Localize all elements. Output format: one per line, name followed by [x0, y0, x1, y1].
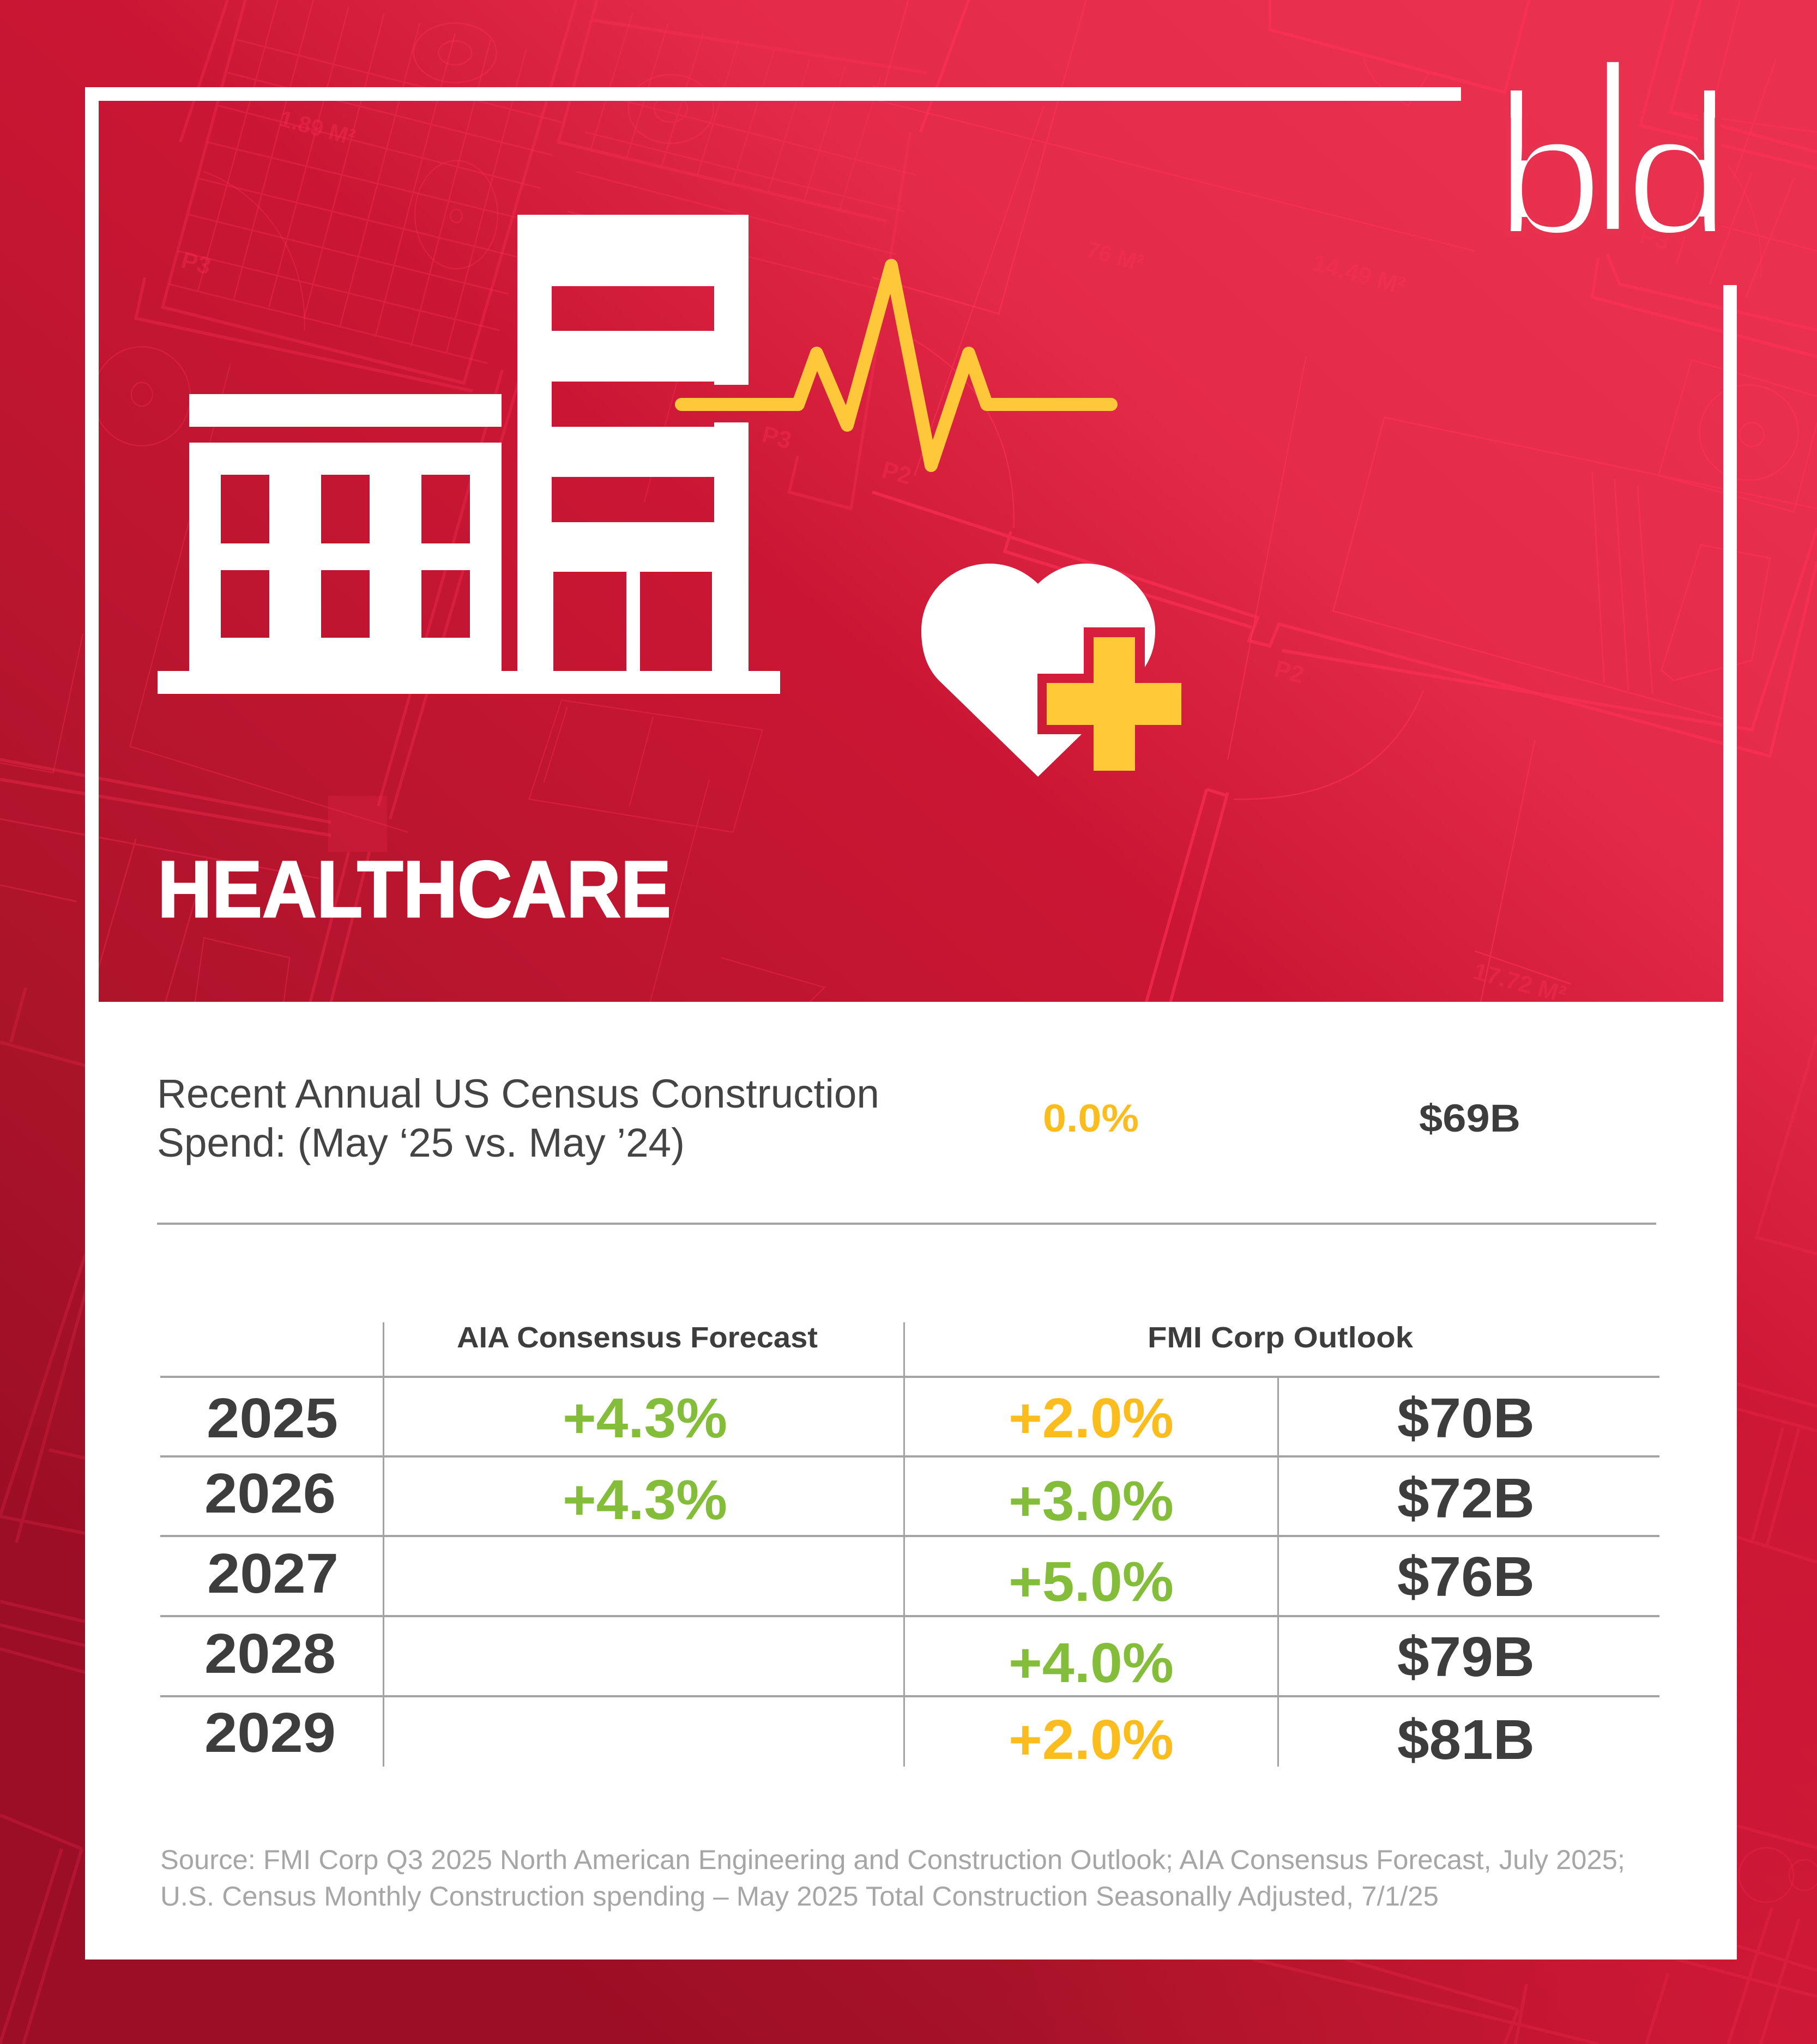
blueprint labels: P2 [1271, 655, 1307, 689]
blueprint labels [178, 105, 1672, 1008]
year labels: 2025 [207, 1387, 338, 1449]
blueprint labels: P3 [1637, 222, 1672, 256]
FMI outlook percentages [1009, 1387, 1174, 1771]
FMI outlook percentages: +2.0% [1009, 1708, 1174, 1771]
table headers: AIA Consensus Forecast [457, 1321, 818, 1354]
blueprint labels: 1.89 M² [277, 105, 358, 150]
census description [157, 1071, 879, 1165]
year labels [204, 1387, 339, 1764]
FMI outlook dollars: $70B [1397, 1387, 1535, 1449]
blueprint labels: P3 [759, 421, 794, 455]
table headers [457, 1321, 1414, 1354]
source note: U.S. Census Monthly Construction spending – May 2025 Total Construction Seasonally Adjusted, 7/1/25 [160, 1881, 1439, 1912]
logo: bld [1495, 16, 1730, 283]
icon: hospital building [158, 215, 780, 694]
blueprint labels: 17.72 M² [1470, 958, 1569, 1008]
year labels: 2026 [204, 1462, 336, 1525]
table [160, 1321, 1659, 1771]
FMI outlook dollars: $81B [1397, 1708, 1535, 1771]
year labels: 2028 [204, 1622, 336, 1685]
FMI outlook percentages: +3.0% [1009, 1469, 1174, 1532]
FMI outlook percentages: +5.0% [1009, 1550, 1174, 1613]
FMI outlook dollars: $72B [1397, 1467, 1535, 1529]
blueprint labels: 14.49 M² [1309, 249, 1408, 300]
source note [160, 1845, 1625, 1912]
icon: heartbeat line [681, 265, 1111, 465]
source note: Source: FMI Corp Q3 2025 North American Engineering and Construction Outlook; AIA Consensus Forecast, July 2025; [160, 1845, 1625, 1875]
divider [157, 1223, 1656, 1225]
table headers: FMI Corp Outlook [1148, 1321, 1414, 1354]
FMI outlook dollars: $79B [1397, 1625, 1535, 1688]
heading: HEALTHCARE [158, 845, 671, 934]
AIA forecast values [563, 1387, 727, 1531]
FMI outlook dollars [1397, 1387, 1535, 1771]
blueprint labels: 76 M² [1084, 236, 1147, 276]
AIA forecast values: +4.3% [563, 1468, 727, 1531]
logo: bld: l [1591, 16, 1634, 283]
year labels: 2027 [207, 1542, 339, 1605]
FMI outlook percentages: +2.0% [1009, 1387, 1174, 1449]
blueprint labels: P2 [879, 456, 914, 490]
AIA forecast values: +4.3% [563, 1387, 727, 1449]
logo: bld: b [1495, 78, 1604, 270]
census spend value: $69B [1419, 1097, 1520, 1140]
logo: bld: d [1625, 78, 1730, 270]
census description: Recent Annual US Census Construction [157, 1071, 879, 1116]
icon: heart with plus [921, 564, 1181, 777]
FMI outlook percentages: +4.0% [1009, 1631, 1174, 1694]
census change value: 0.0% [1043, 1097, 1139, 1140]
year labels: 2029 [204, 1701, 336, 1764]
white frame [85, 87, 1737, 1003]
census description: Spend: (May ‘25 vs. May ’24) [157, 1120, 685, 1165]
FMI outlook dollars: $76B [1397, 1545, 1535, 1608]
blueprint labels: P3 [178, 246, 214, 280]
panel: data [85, 1002, 1737, 1960]
